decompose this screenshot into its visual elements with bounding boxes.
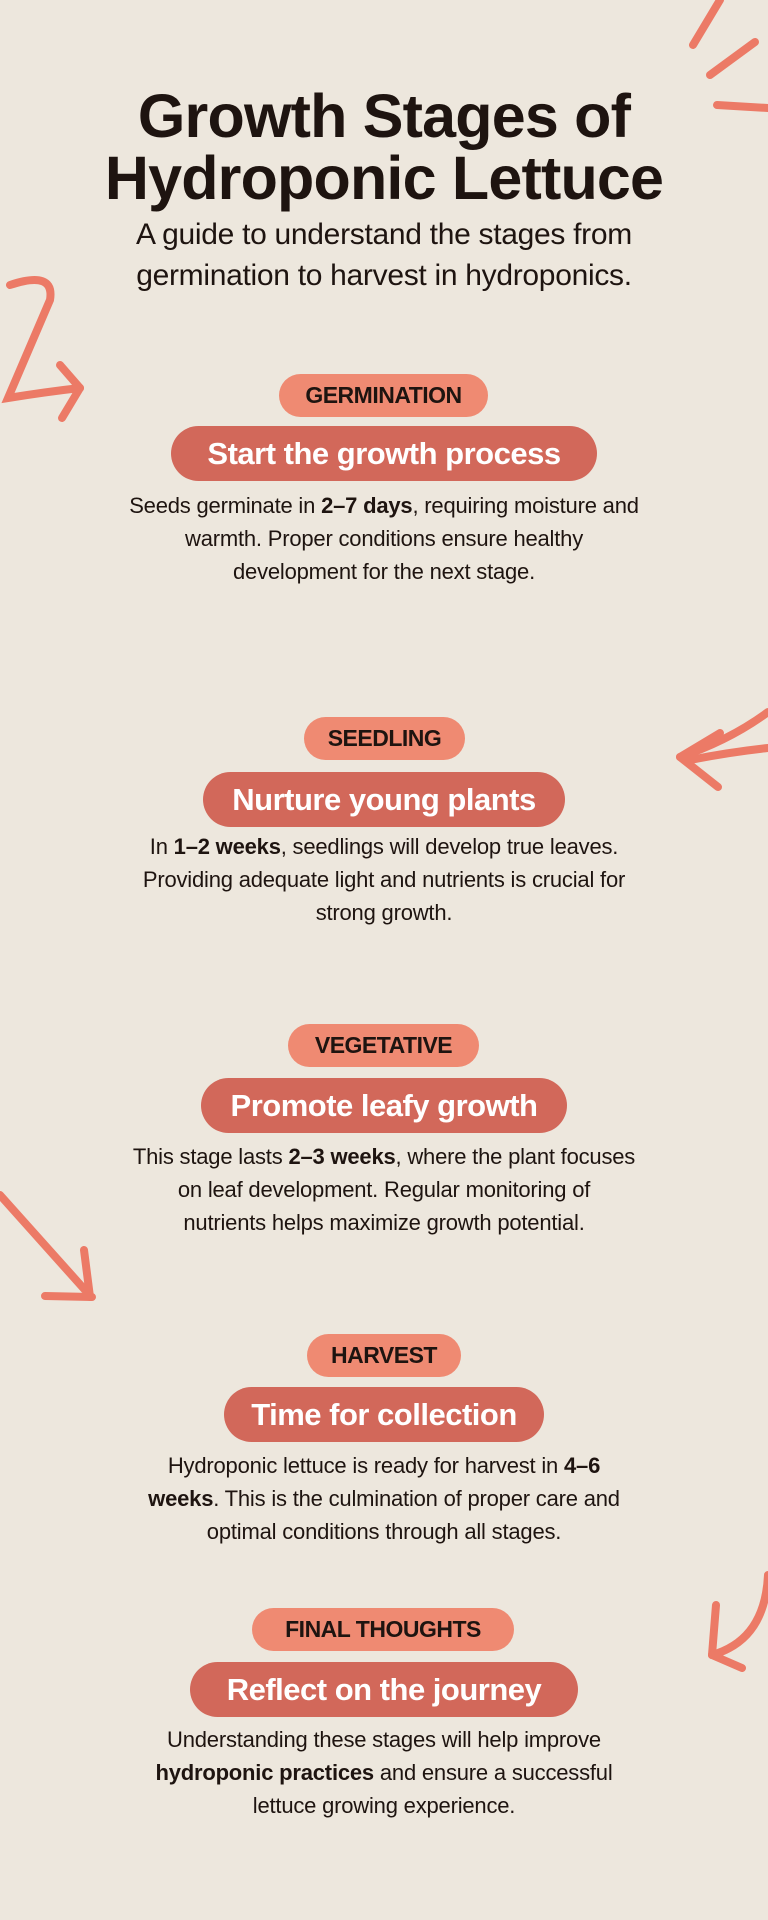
section: vegetative [133, 1024, 635, 1235]
arrow: right pointing left [680, 712, 768, 787]
text: This stage lasts 2–3 weeks, where the plant focuses [133, 1144, 635, 1169]
heading: Time for collection [251, 1397, 517, 1432]
heading: Nurture young plants [232, 782, 536, 817]
subtitle [136, 218, 632, 292]
heading [190, 1662, 578, 1717]
label: GERMINATION [305, 382, 462, 408]
label [288, 1024, 479, 1067]
title: Hydroponic Lettuce [105, 144, 663, 212]
heading [171, 426, 597, 481]
text [129, 493, 639, 584]
heading: Reflect on the journey [227, 1672, 541, 1707]
arrow: left pointing down-right [0, 1195, 92, 1297]
subtitle: A guide to understand the stages from [136, 218, 632, 251]
text: Hydroponic lettuce is ready for harvest in 4–6 [168, 1453, 600, 1478]
subtitle: germination to harvest in hydroponics. [136, 259, 632, 292]
text: development for the next stage. [233, 559, 535, 584]
text: Seeds germinate in 2–7 days, requiring moisture and [129, 493, 639, 518]
text [143, 834, 625, 925]
heading: Start the growth process [207, 436, 561, 471]
text: Providing adequate light and nutrients is crucial for [143, 867, 625, 892]
text: strong growth. [316, 900, 452, 925]
section: germination [129, 374, 639, 584]
heading [224, 1387, 544, 1442]
label [279, 374, 488, 417]
heading [201, 1078, 567, 1133]
label: FINAL THOUGHTS [285, 1616, 481, 1642]
text: nutrients helps maximize growth potential. [183, 1210, 585, 1235]
text: In 1–2 weeks, seedlings will develop true leaves. [150, 834, 618, 859]
text: warmth. Proper conditions ensure healthy [185, 526, 583, 551]
text: optimal conditions through all stages. [207, 1519, 561, 1544]
text: on leaf development. Regular monitoring of [178, 1177, 590, 1202]
label [307, 1334, 461, 1377]
section: seedling [143, 717, 625, 925]
heading: Promote leafy growth [231, 1088, 537, 1123]
title: Growth Stages of [138, 82, 630, 150]
title [105, 82, 663, 212]
arrow: right bottom curve [712, 1575, 768, 1668]
label [252, 1608, 514, 1651]
icon: top right strokes [693, 0, 768, 108]
text [133, 1144, 635, 1235]
label [304, 717, 465, 760]
text: hydroponic practices and ensure a successful [155, 1760, 613, 1785]
section: harvest [148, 1334, 620, 1544]
text: lettuce growing experience. [253, 1793, 515, 1818]
text: Understanding these stages will help improve [167, 1727, 601, 1752]
arrow: left zigzag [8, 280, 80, 418]
heading [203, 772, 565, 827]
label: HARVEST [331, 1342, 437, 1368]
text: weeks. This is the culmination of proper care and [148, 1486, 620, 1511]
text [148, 1453, 620, 1544]
section: final thoughts [155, 1608, 613, 1818]
text [155, 1727, 613, 1818]
label: SEEDLING [328, 725, 441, 751]
label: VEGETATIVE [315, 1032, 452, 1058]
